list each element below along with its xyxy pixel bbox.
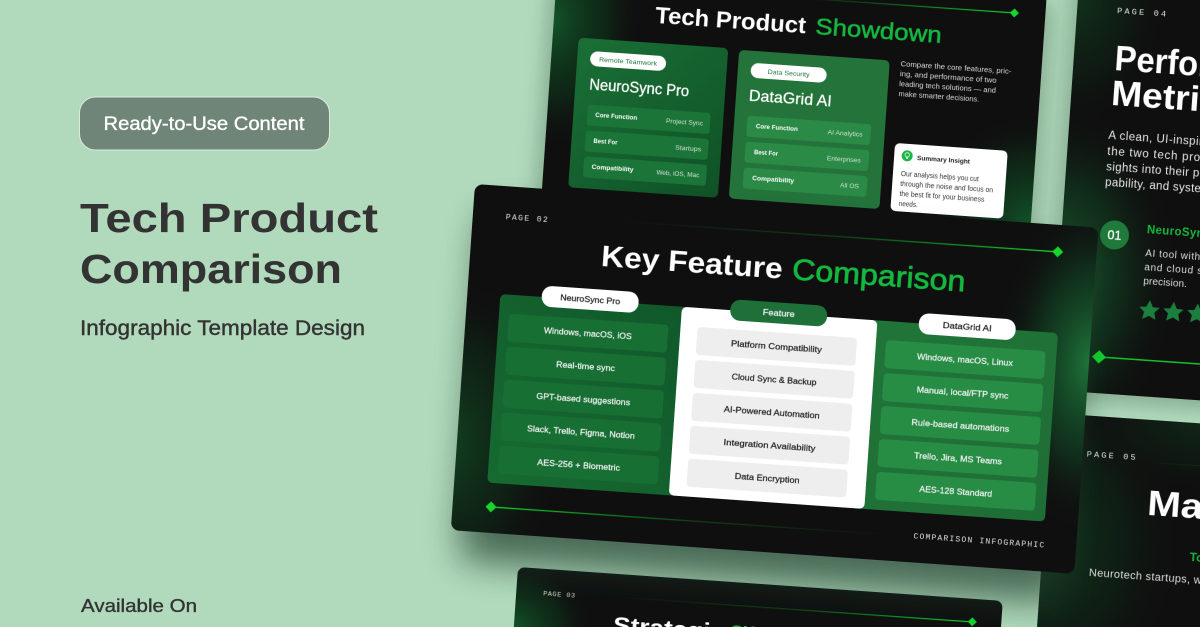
accent line top with diamond (622, 216, 1064, 258)
row (691, 393, 853, 432)
tag: Remote Teamwork (590, 51, 667, 71)
row (505, 347, 666, 386)
intro paragraph (898, 59, 1012, 106)
accent line with diamond (706, 0, 1019, 18)
insight text: Our analysis helps you cut (901, 171, 979, 183)
row: best for (744, 142, 869, 171)
row: best for: Enterprises (827, 155, 862, 165)
column tag: Feature (762, 307, 795, 319)
subtitle: Infographic Template Design (80, 317, 365, 340)
row (686, 459, 848, 498)
row (689, 426, 850, 465)
row (500, 412, 662, 452)
insight text: the best fit for your business (899, 191, 985, 204)
tag: Data Security (750, 63, 827, 83)
star rating (1139, 299, 1200, 323)
row (498, 445, 659, 484)
row (502, 380, 664, 419)
intro paragraph: Compare the core features, pric- (900, 59, 1012, 76)
card: NeuroSync Pro (568, 38, 728, 198)
row (507, 314, 669, 353)
footer label: COMPARISON INFOGRAPHIC (913, 532, 1045, 551)
accent line with diamond (616, 592, 977, 627)
accent line bottom with diamond (485, 501, 890, 540)
heading: Key Feature (600, 240, 784, 286)
number badge 01: 01 (1107, 228, 1122, 243)
row (884, 340, 1046, 379)
heading: Showdown (815, 13, 943, 48)
row: Rule-based automations (911, 417, 1010, 434)
row (693, 360, 855, 399)
row: compatibility (743, 167, 868, 197)
intro paragraph: leading tech solutions — and (899, 79, 996, 95)
product name: DataGrid AI (748, 88, 832, 110)
slide: page 02 Key Feature Comparison (435, 184, 1104, 626)
row (880, 406, 1041, 445)
column tag (541, 285, 639, 313)
slide: page 04 Performance Metrics (1047, 0, 1200, 418)
accent line (1144, 462, 1200, 481)
intro paragraph: ing, and performance of two (900, 69, 997, 85)
number badge 01 (1099, 220, 1130, 250)
row: core function (587, 104, 711, 134)
column tag (918, 313, 1016, 341)
row: best for (585, 130, 709, 160)
insight title: Summary Insight (917, 155, 971, 166)
column tag: DataGrid AI (942, 320, 992, 333)
page label: PAGE 02 (505, 213, 548, 225)
card: DataGrid AI (729, 50, 890, 209)
row: core function: Core Function (756, 123, 798, 133)
item description: precision. (1143, 276, 1187, 290)
icon: bulb (901, 150, 913, 162)
row: Cloud Sync & Backup (731, 371, 817, 387)
row: best for: Startups (675, 145, 702, 153)
row (877, 439, 1039, 478)
product name: NeuroSync Pro (589, 77, 690, 100)
row: core function: Core Function (595, 112, 637, 122)
badge: Ready-to-Use Content (80, 97, 330, 150)
panel: Feature column (669, 296, 878, 509)
row: compatibility: Compatibility (591, 164, 634, 174)
title (80, 195, 378, 292)
page label: PAGE 05 (1086, 450, 1136, 463)
row: Platform Compatibility (731, 338, 823, 355)
row: compatibility: Web, iOS, Mac (656, 169, 700, 179)
row: Manual, local/FTP sync (916, 384, 1010, 401)
divider with diamond (1092, 350, 1200, 385)
insight text: through the noise and focus on (900, 181, 993, 194)
row: Trello, Jira, MS Teams (914, 450, 1002, 466)
title: Tech Product (80, 195, 378, 241)
title: Comparison (80, 246, 342, 292)
card: Summary Insight (890, 143, 1008, 219)
heading (600, 240, 967, 298)
badge: Ready-to-Use Content: Ready-to-Use Content (104, 113, 305, 135)
row: GPT-based suggestions (536, 391, 630, 407)
row: Integration Availability (723, 437, 817, 453)
slide: page 05 Market (1037, 415, 1200, 627)
heading: Tech Product (654, 2, 807, 38)
panel: NeuroSync Pro column (487, 283, 691, 496)
slide: page 01 Tech Product Showdown (527, 0, 1060, 224)
row: AES-128 Standard (919, 484, 993, 499)
row (875, 472, 1037, 511)
row: core function (746, 116, 871, 145)
row: Windows, macOS, iOS (544, 325, 632, 341)
tag: Remote Teamwork: Remote Teamwork (599, 57, 658, 68)
row: best for: Best For (754, 149, 779, 158)
insight text (899, 171, 994, 214)
slide: page 03 Strategic (514, 567, 1002, 627)
insight text: needs. (899, 201, 918, 209)
heading (654, 2, 943, 48)
heading (1110, 39, 1200, 127)
heading block: left column (80, 97, 378, 616)
item description (1143, 248, 1200, 296)
row: best for: Best For (593, 138, 618, 147)
row: AES-256 + Biometric (537, 457, 621, 473)
row: compatibility (583, 156, 707, 186)
page label: PAGE 04 (1117, 6, 1166, 20)
row (882, 373, 1043, 412)
available on label: Available On (81, 596, 197, 616)
description (1105, 130, 1200, 203)
row: AI-Powered Automation (724, 404, 820, 421)
row: core function: Project Sync (666, 118, 704, 128)
intro paragraph: make smarter decisions. (898, 89, 980, 104)
row: compatibility: Compatibility (752, 175, 795, 185)
row: Windows, macOS, Linux (917, 351, 1014, 368)
page label: PAGE 03 (543, 590, 575, 601)
column tag: NeuroSync Pro (560, 292, 621, 306)
tag: Data Security: Data Security (767, 69, 810, 79)
row: Slack, Trello, Figma, Notion (527, 423, 635, 441)
column tag (730, 299, 828, 327)
row: core function: AI Analytics (827, 129, 864, 139)
heading (612, 612, 791, 627)
row (696, 327, 857, 366)
row: compatibility: All OS (840, 182, 860, 191)
row: Data Encryption (734, 471, 800, 485)
row: Real-time sync (556, 359, 616, 373)
panel: DataGrid AI column (855, 309, 1059, 522)
heading: Comparison (791, 253, 967, 298)
